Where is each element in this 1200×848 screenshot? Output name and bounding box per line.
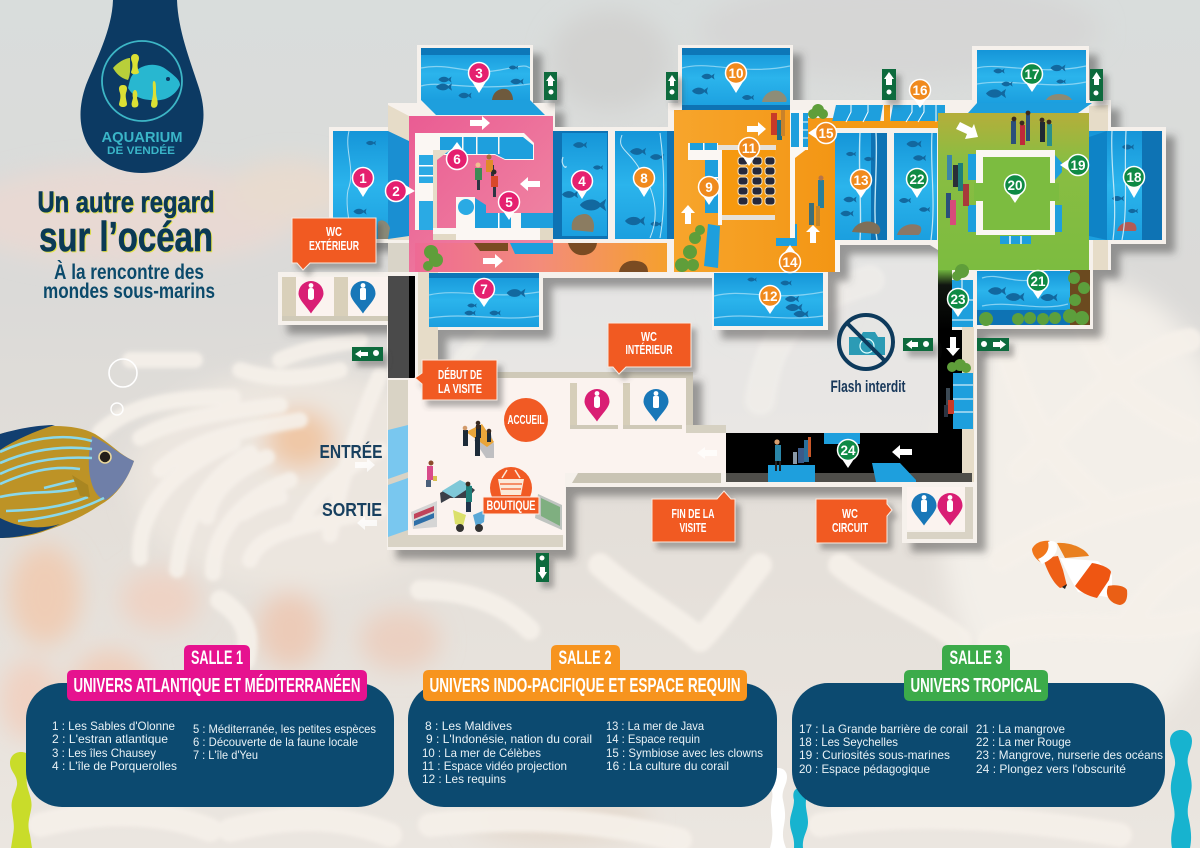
numbered pins: salle 3: 22 [909, 172, 925, 187]
salle 3 list: 22 : La mer Rouge [976, 735, 1071, 749]
salle 3 heading tabs: SALLE 3 [950, 648, 1002, 669]
label: WC extérieur: WC [326, 224, 342, 239]
bubbles [109, 359, 137, 415]
numbered pins: salle 3 [838, 64, 1144, 468]
label: WC circuit [816, 499, 892, 543]
salle 1 list: 7 : L'île d'Yeu [193, 748, 258, 762]
numbered pins: salle 1: 4 [578, 174, 586, 189]
corridor: obscurity space [726, 433, 972, 482]
salle 2 list: 12 : Les requins [422, 772, 506, 786]
tank 17 [968, 50, 1092, 113]
salle 1 heading tabs: SALLE 1 [191, 648, 243, 669]
accueil badge [504, 398, 548, 442]
salle 3 list: 21 : La mangrove [976, 722, 1065, 736]
salle 2 list: 16 : La culture du corail [606, 759, 729, 773]
numbered pins: salle 2: 14 [782, 255, 798, 270]
tank 13 [835, 133, 887, 240]
salle 1 list: 3 : Les îles Chausey [52, 746, 156, 760]
salle 2 list: 10 : La mer de Célèbes [422, 746, 541, 760]
numbered pins: salle 1: 3 [475, 66, 483, 81]
label: WC circuit: CIRCUIT [832, 520, 868, 535]
salle 3 list: 17 : La Grande barrière de corail [799, 722, 968, 736]
title: Un autre regard [38, 186, 214, 219]
numbered pins: salle 2: 13 [853, 173, 869, 188]
salle 3 list: 23 : Mangrove, nurserie des océans [976, 748, 1163, 762]
numbered pins: salle 3: 17 [1024, 67, 1040, 82]
tank 22 [894, 133, 937, 240]
tank 7 [429, 273, 539, 327]
tank 12 [714, 273, 823, 326]
salle 2 list: 15 : Symbiose avec les clowns [606, 746, 763, 760]
boutique badge: BOUTIQUE [486, 498, 536, 513]
salle 2 heading tabs [423, 645, 747, 701]
tank 1 [333, 131, 409, 239]
salle 2 list: 13 : La mer de Java [606, 719, 704, 733]
salle 1 heading tabs: UNIVERS ATLANTIQUE ET MÉDITERRANÉEN [74, 674, 360, 697]
numbered pins: salle 1: 5 [505, 195, 513, 210]
tank 3 [421, 48, 545, 115]
accueil badge: ACCUEIL [508, 413, 545, 427]
numbered pins: salle 2: 15 [818, 126, 834, 141]
label: début de la visite [415, 360, 497, 400]
tank 10 [682, 48, 790, 110]
numbered pins: salle 2: 11 [742, 141, 757, 156]
salle 1 list [52, 719, 376, 773]
title: mondes sous-marins [43, 280, 215, 303]
salle 3 list: 20 : Espace pédagogique [799, 762, 930, 776]
panel: salle 3 rooms [938, 105, 1108, 270]
tank 18 [1089, 131, 1162, 240]
title [38, 186, 215, 303]
numbered pins: salle 3: 21 [1030, 274, 1046, 289]
panel: salle 3 legend [792, 645, 1165, 807]
salle 1 list: 4 : L'île de Porquerolles [52, 759, 177, 773]
label: WC extérieur [292, 218, 376, 270]
logo: Aquarium de Vendée drop: AQUARIUM [102, 129, 182, 146]
label: fin de la visite: FIN DE LA [672, 506, 715, 521]
salle 3 heading tabs: UNIVERS TROPICAL [910, 675, 1042, 697]
numbered pins: salle 2 [634, 62, 930, 314]
numbered pins: salle 2: 12 [762, 289, 778, 304]
reception desk [463, 421, 494, 458]
label: WC extérieur: EXTÉRIEUR [309, 238, 359, 253]
salle 1 heading tabs [67, 645, 367, 701]
salle 1 list: 5 : Méditerranée, les petites espèces [193, 722, 376, 736]
map: building walls [278, 45, 1166, 550]
corridor: mangrove to darkness [938, 270, 974, 482]
flash warning text: Flash interdit [830, 377, 906, 396]
salle 3 list [799, 722, 1163, 776]
tank 4 [553, 131, 608, 239]
WC circuit room [907, 487, 973, 539]
salle 2 list: 9 : L'Indonésie, nation du corail [426, 732, 592, 746]
label: WC circuit: WC [842, 506, 858, 521]
corridor: dark passage start [388, 276, 415, 378]
WC exterior room [282, 277, 388, 321]
numbered pins: salle 1 [352, 62, 592, 307]
label: début de la visite: DÉBUT DE [438, 367, 482, 382]
label: fin de la visite [652, 491, 735, 542]
tank 21 [977, 270, 1090, 326]
icon: no flash camera [839, 315, 893, 369]
label: WC intérieur [608, 323, 691, 374]
salle 3 heading tabs [904, 645, 1048, 701]
numbered pins: salle 1: 6 [453, 152, 461, 167]
panel: entrance hall [388, 372, 726, 547]
numbered pins: salle 2: 8 [640, 171, 648, 186]
numbered pins: salle 3: 20 [1007, 178, 1023, 193]
salle 3 list: 19 : Curiosités sous-marines [799, 748, 950, 762]
visitors [475, 110, 1052, 471]
label: WC intérieur: WC [641, 329, 657, 344]
title: sur l’océan [39, 213, 213, 260]
panel: salle 2 legend [408, 645, 777, 807]
lower wall beige [418, 272, 438, 378]
salle 3 list: 18 : Les Seychelles [799, 735, 898, 749]
courtyard veil [438, 245, 938, 433]
numbered pins: salle 3: 24 [840, 443, 856, 458]
direction arrows [355, 116, 978, 530]
emergency exit signs [352, 69, 1103, 582]
angelfish [0, 425, 134, 538]
clownfish [1032, 541, 1127, 605]
numbered pins: salle 1: 1 [359, 171, 367, 186]
numbered pins: salle 2: 16 [912, 83, 928, 98]
salle 1 list: 2 : L'estran atlantique [52, 732, 168, 746]
salle 2 heading tabs: UNIVERS INDO-PACIFIQUE ET ESPACE REQUIN [430, 675, 740, 697]
salle 2 list [422, 719, 763, 786]
decorative squiggles [10, 730, 1192, 848]
salle 2 list: 8 : Les Maldives [425, 719, 512, 733]
salle 1 list: 6 : Découverte de la faune locale [193, 735, 358, 749]
panel: salle 1 legend [26, 645, 394, 807]
numbered pins: salle 2: 10 [728, 66, 744, 81]
salle 2 list: 11 : Espace vidéo projection [422, 759, 567, 773]
WC pins [298, 281, 962, 526]
entrance label: ENTRÉE [320, 441, 382, 462]
numbered pins: salle 3: 23 [950, 292, 966, 307]
salle 2 heading tabs: SALLE 2 [558, 648, 612, 669]
boutique badge [483, 467, 539, 514]
salle 3 list: 24 : Plongez vers l'obscurité [976, 762, 1126, 776]
panel: salle 2 rooms [674, 110, 840, 272]
title: À la rencontre des [54, 261, 204, 284]
blue strips north corridor [832, 105, 945, 128]
video seats [738, 157, 775, 205]
numbered pins: salle 2: 9 [705, 180, 713, 195]
label: début de la visite: LA VISITE [438, 381, 482, 396]
plants [423, 104, 971, 373]
shop furnishings [411, 460, 562, 532]
tank 8 [615, 131, 674, 239]
label: WC intérieur: INTÉRIEUR [626, 342, 673, 357]
logo: Aquarium de Vendée drop [80, 0, 204, 173]
exit label: SORTIE [322, 500, 382, 520]
panel: salle 1 rooms [388, 105, 667, 272]
salle 1 list: 1 : Les Sables d'Olonne [52, 719, 175, 733]
numbered pins: salle 3: 19 [1070, 158, 1086, 173]
logo: Aquarium de Vendée drop: DE VENDÉE [107, 144, 175, 157]
numbered pins: salle 1: 7 [480, 282, 488, 297]
label: fin de la visite: VISITE [680, 520, 707, 535]
numbered pins: salle 1: 2 [392, 184, 400, 199]
numbered pins: salle 3: 18 [1126, 170, 1142, 185]
salle 2 list: 14 : Espace requin [606, 732, 700, 746]
